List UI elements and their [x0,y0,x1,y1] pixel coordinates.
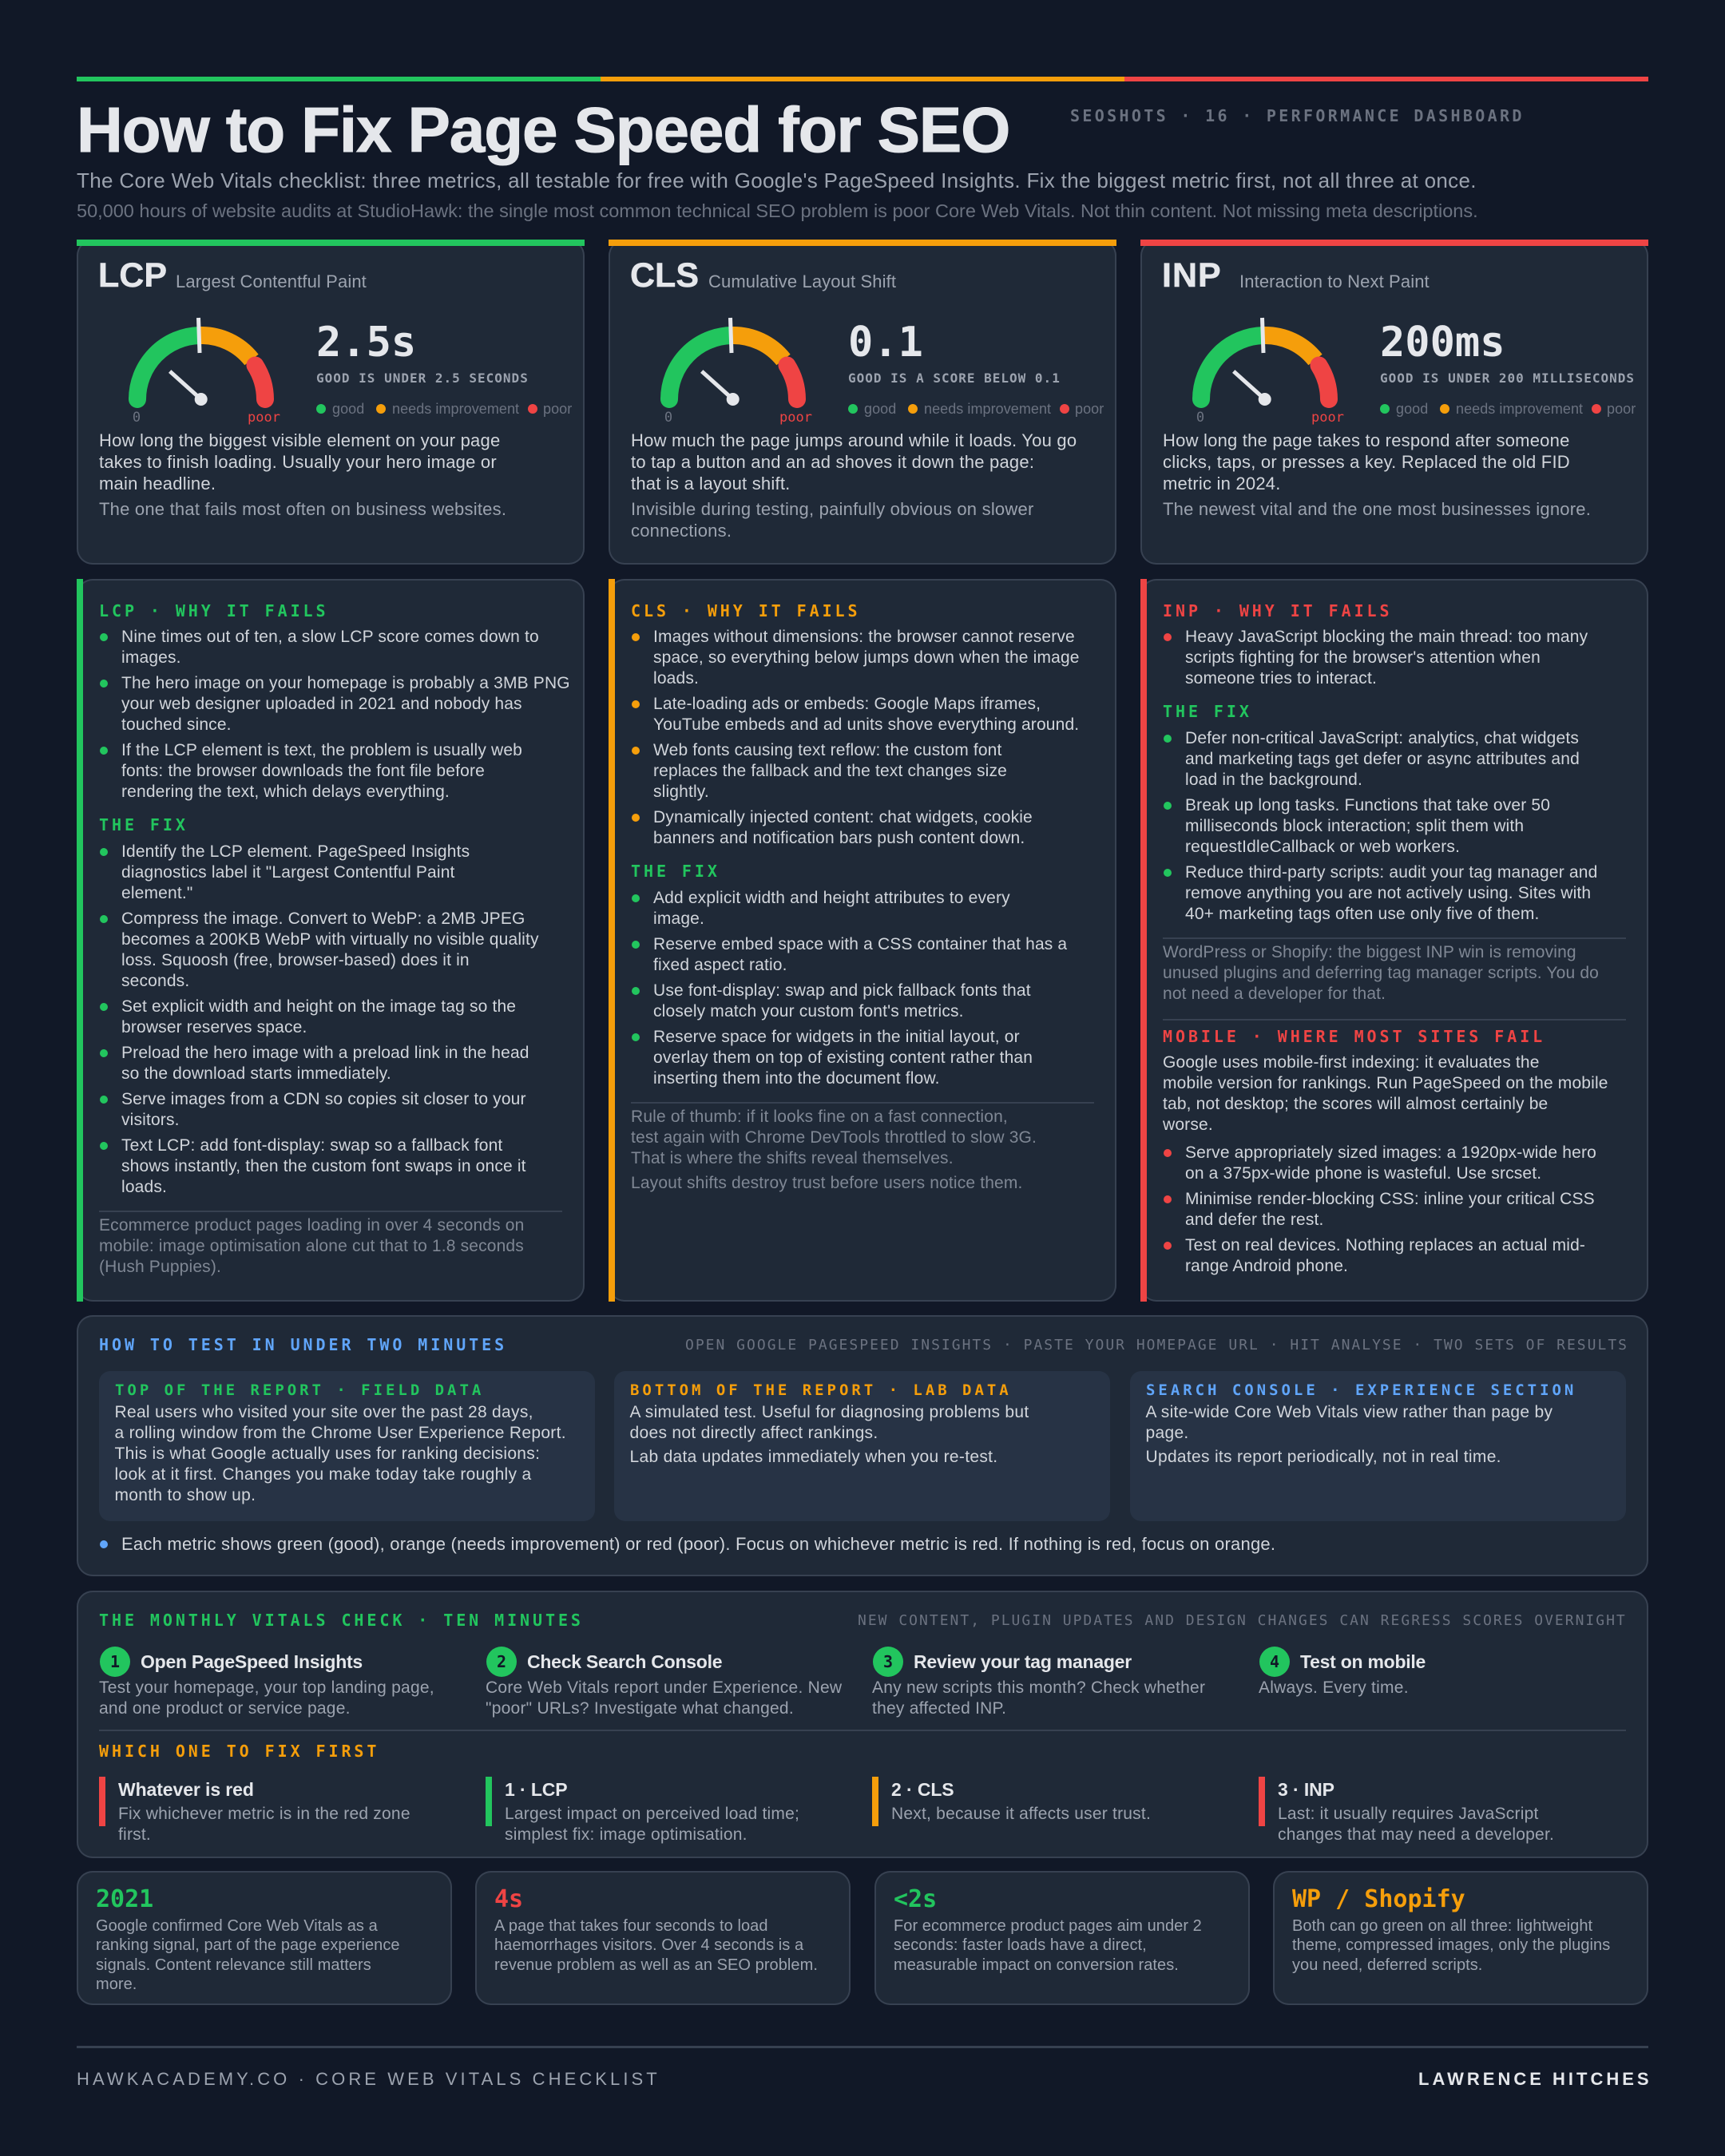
LCP fail and fix lists: fonts: the browser downloads the font file before [121,762,485,779]
CLS fail and fix lists: That is where the shifts reveal themselves. [631,1149,954,1167]
step number [100,1647,130,1677]
INP fail, fix and mobile lists: unused plugins and deferring tag manager scripts. You do [1163,964,1599,982]
field data text [115,1403,566,1504]
top colour rule [77,77,1648,81]
step number [486,1647,517,1677]
INP accent bar [1140,240,1648,246]
LCP fail and fix lists: Preload the hero image with a preload link in the head [121,1044,529,1062]
lab data text: does not directly affect rankings. [629,1424,878,1442]
legend: poor [1607,401,1636,417]
section heading: THE MONTHLY VITALS CHECK · TEN MINUTES [99,1611,584,1630]
legend: poor [543,401,572,417]
legend [1380,401,1636,417]
priority title: 1 · LCP [505,1779,568,1800]
step text [99,1678,434,1718]
INP fail, fix and mobile lists: remove anything you are not actively using. Sites with [1185,884,1591,902]
step number: 2 [497,1652,506,1671]
step text: and one product or service page. [99,1699,351,1718]
CLS fail and fix lists: test again with Chrome DevTools throttled to slow 3G. [631,1128,1037,1147]
CLS threshold note: GOOD IS A SCORE BELOW 0.1 [848,371,1061,386]
gauge: LCP: 0 [133,410,141,426]
gauge: INP: poor [1311,410,1344,426]
step text [872,1678,1205,1718]
priority text: Largest impact on perceived load time; [505,1805,799,1823]
panel: LCP why it fails [77,579,585,1302]
CLS fail and fix lists: THE FIX [631,862,720,881]
footer source: HAWKACADEMY.CO · CORE WEB VITALS CHECKLIST [77,2069,660,2089]
step 1 [99,1647,434,1718]
LCP description: takes to finish loading. Usually your hero image or [99,452,497,472]
CLS description [631,430,1077,541]
priority text: changes that may need a developer. [1278,1825,1554,1844]
step title: Test on mobile [1300,1651,1426,1672]
priority: INP [1259,1777,1554,1844]
INP fail, fix and mobile lists: Defer non-critical JavaScript: analytics, chat widgets [1185,729,1579,747]
stat text: you need, deferred scripts. [1292,1956,1482,1974]
step number: 1 [110,1652,120,1671]
priority bar [99,1777,105,1826]
CLS fail and fix lists: overlay them on top of existing content rather than [653,1048,1033,1067]
priority text: Fix whichever metric is in the red zone [118,1805,410,1823]
search console heading: SEARCH CONSOLE · EXPERIENCE SECTION [1146,1381,1576,1399]
INP fail, fix and mobile lists: milliseconds block interaction; split them with [1185,817,1524,835]
panel: INP metric card [1140,240,1648,565]
LCP accent bar [77,240,585,246]
stat text: measurable impact on conversion rates. [894,1956,1179,1974]
INP fail, fix and mobile lists: tab, not desktop; the scores will almost certainly be [1163,1094,1548,1113]
LCP fail and fix lists: images. [121,648,181,666]
field data text: a rolling window from the Chrome User Experience Report. [115,1424,566,1442]
LCP description [99,430,506,519]
CLS full name: Cumulative Layout Shift [708,271,896,291]
LCP fail and fix lists: (Hush Puppies). [99,1258,221,1276]
LCP fail and fix lists: browser reserves space. [121,1018,307,1036]
LCP fail and fix lists: Nine times out of ten, a slow LCP score comes down to [121,628,539,645]
INP fail, fix and mobile lists: 40+ marketing tags often use only five of them. [1185,905,1540,923]
INP fail, fix and mobile lists: scripts fighting for the browser's attention when [1185,648,1541,666]
section side note: NEW CONTENT, PLUGIN UPDATES AND DESIGN CHANGES CAN REGRESS SCORES OVERNIGHT [858,1612,1627,1629]
LCP fail and fix lists: Ecommerce product pages loading in over 4 seconds on [99,1216,524,1235]
CLS fail and fix lists: inserting them into the document flow. [653,1069,940,1088]
legend: needs improvement [1456,401,1583,417]
LCP fail and fix lists: shows instantly, then the custom font swaps in once it [121,1157,526,1175]
gauge: INP [1192,318,1344,426]
step text: Always. Every time. [1259,1678,1409,1697]
CLS fail and fix lists: loads. [653,669,699,687]
INP fail, fix and mobile lists: and defer the rest. [1185,1211,1323,1228]
legend: needs improvement [392,401,519,417]
gauge: LCP: poor [248,410,280,426]
priority text [505,1805,799,1844]
CLS fail and fix lists: fixed aspect ratio. [653,956,787,974]
CLS fail and fix lists: Dynamically injected content: chat widgets, cookie [653,808,1033,826]
section heading: HOW TO TEST IN UNDER TWO MINUTES [99,1335,507,1354]
field data text: This is what Google actually uses for ranking decisions: [115,1445,540,1463]
priority title: Whatever is red [118,1779,254,1800]
lab data heading: BOTTOM OF THE REPORT · LAB DATA [630,1381,1012,1399]
INP fail, fix and mobile lists: Google uses mobile-first indexing: it evaluates the [1163,1052,1540,1072]
step text: Test your homepage, your top landing page, [99,1678,434,1697]
LCP fail and fix lists: Text LCP: add font-display: swap so a fallback font [121,1136,502,1155]
gauge: LCP [129,318,280,426]
LCP fail and fix lists: If the LCP element is text, the problem is usually web [121,741,522,759]
INP description [1163,430,1591,519]
INP fail, fix and mobile lists: on a 375px-wide phone is wasteful. Use srcset. [1185,1164,1541,1182]
priority text [118,1805,410,1844]
gauge: CLS: poor [779,410,812,426]
INP fail, fix and mobile lists: Heavy JavaScript blocking the main thread: too many [1185,628,1588,645]
legend: good [332,401,364,417]
gauge: CLS [660,318,812,426]
step title: Open PageSpeed Insights [141,1651,363,1672]
field data text: month to show up. [115,1486,256,1504]
panel: how to test [77,1315,1648,1576]
panel: CLS why it fails [609,579,1116,1302]
panel: monthly vitals check [77,1591,1648,1858]
INP fail, fix and mobile lists: Break up long tasks. Functions that take over 50 [1185,796,1550,814]
box: search console [1130,1371,1626,1521]
CLS description: that is a layout shift. [631,474,791,493]
gauge: INP: 0 [1196,410,1204,426]
stat text: ranking signal, part of the page experience [96,1936,400,1954]
field data heading: TOP OF THE REPORT · FIELD DATA [115,1381,484,1399]
priority: whatever is red [99,1777,410,1844]
field data text: look at it first. Changes you make today take roughly a [115,1465,531,1484]
LCP fail and fix lists: visitors. [121,1111,180,1129]
LCP fail and fix lists: LCP · WHY IT FAILS [99,601,328,620]
stat card: WP / Shopify [1273,1871,1648,2005]
INP threshold value: 200ms [1380,319,1505,367]
priority title: 3 · INP [1278,1779,1334,1800]
priority heading: WHICH ONE TO FIX FIRST [99,1742,379,1761]
step number [873,1647,903,1677]
CLS description: How much the page jumps around while it loads. You go [631,430,1077,450]
INP fail, fix and mobile lists [1163,601,1626,1274]
lab data text: A simulated test. Useful for diagnosing problems but [629,1403,1029,1421]
intro note: 50,000 hours of website audits at StudioHawk: the single most common technical SEO problem is poor Core Web Vitals. Not thin content. Not missing meta descriptions. [77,200,1478,221]
INP fail, fix and mobile lists: mobile version for rankings. Run PageSpeed on the mobile [1163,1073,1608,1092]
INP fail, fix and mobile lists: Serve appropriately sized images: a 1920px-wide hero [1185,1143,1596,1161]
step 4 [1259,1647,1426,1697]
LCP fail and fix lists: rendering the text, which delays everything. [121,783,450,800]
search console text: page. [1145,1424,1189,1442]
step 2 [486,1647,842,1718]
CLS fail and fix lists: Reserve space for widgets in the initial layout, or [653,1028,1020,1046]
step 3 [872,1647,1205,1718]
stat card: 2021 [77,1871,452,2005]
INP threshold note: GOOD IS UNDER 200 MILLISECONDS [1380,371,1635,386]
LCP description: How long the biggest visible element on your page [99,430,500,450]
CLS fail and fix lists: Use font-display: swap and pick fallback fonts that [653,981,1031,1000]
CLS description: connections. [631,521,732,541]
stat value: 4s [494,1885,523,1913]
INP fail, fix and mobile lists: Reduce third-party scripts: audit your tag manager and [1185,863,1597,882]
CLS description: Invisible during testing, painfully obvious on slower [631,499,1033,519]
search console text [1145,1403,1552,1466]
stat text: signals. Content relevance still matters [96,1956,371,1974]
panel: INP why it fails [1140,579,1648,1302]
step title: Check Search Console [527,1651,722,1672]
INP fail, fix and mobile lists: requestIdleCallback or web workers. [1185,838,1460,856]
gauge: CLS: 0 [664,410,672,426]
INP full name: Interaction to Next Paint [1239,271,1430,291]
step text: Core Web Vitals report under Experience. New [486,1678,842,1697]
priority bar [872,1777,878,1826]
LCP fail and fix lists: Set explicit width and height on the image tag so the [121,997,516,1016]
INP fail, fix and mobile lists: WordPress or Shopify: the biggest INP win is removing [1163,943,1576,961]
LCP fail and fix lists: THE FIX [99,815,188,834]
CLS fail and fix lists: Reserve embed space with a CSS container that has a [653,935,1067,953]
LCP fail and fix lists: so the download starts immediately. [121,1064,391,1083]
legend: good [1396,401,1428,417]
section side note: OPEN GOOGLE PAGESPEED INSIGHTS · PASTE YOUR HOMEPAGE URL · HIT ANALYSE · TWO SETS OF RESULTS [685,1337,1628,1353]
LCP fail and fix lists: becomes a 200KB WebP with virtually no visible quality [121,930,539,949]
LCP side bar [77,579,83,1302]
CLS side bar [609,579,615,1302]
panel: CLS metric card [609,240,1116,565]
LCP fail and fix lists: touched since. [121,715,232,733]
INP fail, fix and mobile lists: not need a developer for that. [1163,985,1386,1003]
INP fail, fix and mobile lists: THE FIX [1163,702,1252,721]
legend [316,401,572,417]
lab data text: Lab data updates immediately when you re-test. [629,1448,997,1466]
legend: good [864,401,896,417]
step number: 3 [883,1652,893,1671]
step text [486,1678,842,1718]
INP fail, fix and mobile lists: load in the background. [1185,771,1362,789]
box: field data [99,1371,595,1521]
LCP fail and fix lists: loads. [121,1178,167,1196]
stat text: A page that takes four seconds to load [494,1917,768,1935]
LCP fail and fix lists: Compress the image. Convert to WebP: a 2MB JPEG [121,910,525,928]
priority text: first. [118,1825,151,1844]
CLS fail and fix lists: banners and notification bars push content down. [653,829,1025,846]
LCP fail and fix lists: mobile: image optimisation alone cut that to 1.8 seconds [99,1237,524,1255]
CLS fail and fix lists: CLS · WHY IT FAILS [631,601,860,620]
stat text: Both can go green on all three: lightweight [1292,1917,1592,1935]
priority bar [1259,1777,1265,1826]
CLS fail and fix lists: Web fonts causing text reflow: the custom font [653,741,1002,759]
field data text: Real users who visited your site over the past 28 days, [115,1403,533,1421]
LCP threshold value: 2.5s [316,319,416,367]
step title: Review your tag manager [914,1651,1132,1672]
INP fail, fix and mobile lists: someone tries to interact. [1185,669,1377,687]
LCP description: main headline. [99,474,216,493]
INP description: The newest vital and the one most businesses ignore. [1163,499,1591,519]
INP fail, fix and mobile lists: Test on real devices. Nothing replaces an actual mid- [1185,1236,1585,1254]
LCP fail and fix lists: element." [121,884,192,902]
stat text: seconds: faster loads have a direct, [894,1936,1147,1954]
priority title: 2 · CLS [891,1779,954,1800]
CLS threshold value: 0.1 [848,319,923,367]
priority text: simplest fix: image optimisation. [505,1825,748,1844]
LCP description: The one that fails most often on business websites. [99,499,506,519]
LCP fail and fix lists: diagnostics label it "Largest Contentful Paint [121,863,455,882]
INP fail, fix and mobile lists: Minimise render-blocking CSS: inline your critical CSS [1185,1190,1595,1207]
CLS fail and fix lists: Rule of thumb: if it looks fine on a fast connection, [631,1108,1008,1126]
panel: LCP metric card [77,240,585,565]
stat text [96,1917,400,1993]
INP fail, fix and mobile lists: and marketing tags get defer or async attributes and [1185,750,1580,768]
lab data text [629,1403,1029,1466]
title: How to Fix Page Speed for SEO [77,94,1009,165]
step text: they affected INP. [872,1699,1006,1718]
legend: needs improvement [924,401,1051,417]
CLS fail and fix lists [631,601,1094,1192]
LCP fail and fix lists [99,601,570,1276]
legend [848,401,1104,417]
INP name: INP [1162,256,1222,295]
step text: Any new scripts this month? Check whether [872,1678,1205,1697]
CLS fail and fix lists: image. [653,910,704,928]
stat text: revenue problem as well as an SEO problem. [494,1956,818,1974]
priority text [1278,1805,1554,1844]
stat card: 4s [475,1871,851,2005]
INP fail, fix and mobile lists: range Android phone. [1185,1257,1348,1274]
LCP fail and fix lists: your web designer uploaded in 2021 and nobody has [121,695,522,712]
stat text [494,1917,818,1974]
INP fail, fix and mobile lists: worse. [1163,1115,1213,1134]
stat text: theme, compressed images, only the plugins [1292,1936,1610,1954]
stat text: For ecommerce product pages aim under 2 [894,1917,1202,1935]
series label: SEOSHOTS · 16 · PERFORMANCE DASHBOARD [1070,106,1525,125]
stat text [894,1917,1202,1974]
stat card: under 2s [874,1871,1250,2005]
LCP threshold note: GOOD IS UNDER 2.5 SECONDS [316,371,529,386]
CLS fail and fix lists: Add explicit width and height attributes to every [653,889,1010,907]
INP description: metric in 2024. [1163,474,1281,493]
legend: poor [1075,401,1104,417]
CLS fail and fix lists: slightly. [653,783,709,800]
CLS fail and fix lists: space, so everything below jumps down when the image [653,648,1080,666]
step number [1259,1647,1290,1677]
CLS fail and fix lists: closely match your custom font's metrics. [653,1002,964,1021]
CLS description: to tap a button and an ad shoves it down the page: [631,452,1034,472]
CLS fail and fix lists: replaces the fallback and the text changes size [653,762,1007,779]
INP description: How long the page takes to respond after someone [1163,430,1570,450]
stat value: <2s [894,1885,937,1913]
subtitle: The Core Web Vitals checklist: three metrics, all testable for free with Google's PageSpeed Insights. Fix the biggest metric first, not all three at once. [77,168,1477,192]
CLS fail and fix lists: Late-loading ads or embeds: Google Maps iframes, [653,695,1041,712]
colour guidance bullet: Each metric shows green (good), orange (needs improvement) or red (poor). Focus on whichever metric is red. If nothing is red, focus on orange. [121,1534,1275,1554]
CLS accent bar [609,240,1116,246]
LCP fail and fix lists: Serve images from a CDN so copies sit closer to your [121,1090,526,1108]
CLS name: CLS [630,256,699,295]
INP description: clicks, taps, or presses a key. Replaced the old FID [1163,452,1570,472]
INP fail, fix and mobile lists: INP · WHY IT FAILS [1163,601,1392,620]
LCP fail and fix lists: The hero image on your homepage is probably a 3MB PNG [121,674,570,692]
priority: LCP [486,1777,799,1844]
LCP fail and fix lists: seconds. [121,972,189,990]
stat text: more. [96,1976,137,1993]
stat text: haemorrhages visitors. Over 4 seconds is a [494,1936,803,1954]
stat text [1292,1917,1610,1974]
LCP full name: Largest Contentful Paint [176,271,367,291]
CLS fail and fix lists: Layout shifts destroy trust before users notice them. [631,1174,1023,1192]
LCP fail and fix lists: Identify the LCP element. PageSpeed Insights [121,842,470,861]
LCP name: LCP [98,256,167,295]
stat text: Google confirmed Core Web Vitals as a [96,1917,378,1935]
footer author: LAWRENCE HITCHES [1418,2069,1652,2089]
step number: 4 [1270,1652,1279,1671]
stat value: WP / Shopify [1292,1885,1465,1913]
priority text: Next, because it affects user trust. [891,1805,1151,1823]
stat value: 2021 [96,1885,153,1913]
step text: "poor" URLs? Investigate what changed. [486,1699,794,1718]
INP fail, fix and mobile lists: MOBILE · WHERE MOST SITES FAIL [1163,1027,1545,1046]
priority: CLS [872,1777,1151,1826]
search console text: Updates its report periodically, not in real time. [1145,1448,1501,1466]
search console text: A site-wide Core Web Vitals view rather than page by [1145,1403,1552,1421]
priority bar [486,1777,492,1826]
priority text: Last: it usually requires JavaScript [1278,1805,1539,1823]
CLS fail and fix lists: Images without dimensions: the browser cannot reserve [653,628,1075,645]
LCP fail and fix lists: loss. Squoosh (free, browser-based) does it in [121,951,470,969]
INP side bar [1140,579,1147,1302]
CLS fail and fix lists: YouTube embeds and ad units shove everything around. [653,715,1079,733]
box: lab data [614,1371,1110,1521]
